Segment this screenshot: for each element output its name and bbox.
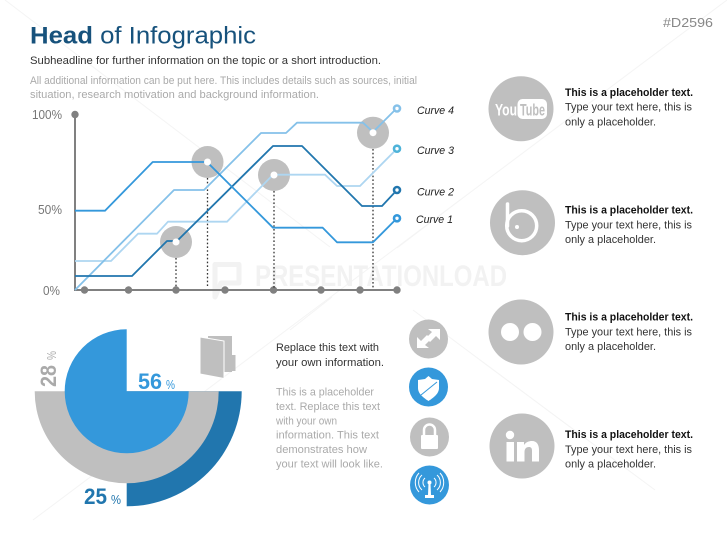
axis labels: 0%: [43, 283, 60, 298]
label 28%: [36, 351, 61, 387]
icon: youtube: You: [495, 100, 517, 120]
text: linkedin: [565, 429, 693, 470]
watermark: [215, 260, 507, 297]
label 56%: 56: [138, 369, 162, 394]
text block: replace text: with your own: [275, 416, 337, 428]
icon: padlock: [410, 418, 449, 456]
curve 2: [75, 146, 397, 276]
text block: replace text: Replace this text with: [276, 342, 379, 354]
product code: #D2596: [663, 16, 713, 30]
highlight discs: [160, 117, 389, 258]
curve labels: Curve 4: [417, 105, 454, 117]
highlight points: [172, 129, 376, 246]
curve 3: [75, 149, 397, 261]
line chart: [32, 105, 455, 298]
text: linkedin: This is a placeholder text.: [565, 429, 693, 441]
text: flickr: This is a placeholder text.: [565, 312, 693, 324]
text block: replace text: information. This text: [276, 430, 379, 442]
text: youtube: [565, 87, 693, 129]
curve labels: Curve 1: [416, 214, 453, 226]
icon: folder: [200, 336, 236, 378]
label 28%: 28: [36, 365, 61, 387]
text: linkedin: Type your text here, this is: [565, 444, 692, 456]
radial chart: %: [111, 492, 121, 507]
dark ring 25%: [127, 391, 242, 506]
axis labels: [32, 107, 62, 298]
text block: replace text: [275, 342, 384, 470]
icon: youtube: Tube: [520, 100, 545, 120]
axis labels: 100%: [32, 107, 62, 122]
curve end markers: [394, 106, 400, 221]
intro text: situation, research motivation and background information.: [30, 89, 319, 101]
icon: bebo: [490, 190, 555, 255]
text: youtube: This is a placeholder text.: [565, 87, 693, 99]
icon: linkedin: [490, 414, 554, 478]
text block: replace text: This is a placeholder: [276, 386, 374, 398]
text: bebo: [565, 205, 693, 246]
dotted drop lines: [176, 149, 373, 288]
curve 1: [75, 162, 397, 242]
intro text: All additional information can be put here. This includes details such as sources, initial: [30, 75, 417, 87]
icon: antenna: [410, 466, 449, 504]
intro text: [30, 75, 417, 101]
text block: replace text: demonstrates how: [276, 444, 367, 456]
radial chart: %: [166, 377, 175, 392]
label 28%: %: [44, 351, 59, 360]
text: bebo: Type your text here, this is: [565, 220, 692, 232]
text: flickr: Type your text here, this is: [565, 326, 692, 338]
text block: replace text: text. Replace this text: [276, 401, 380, 413]
icon: shield: [409, 368, 448, 406]
text: bebo: This is a placeholder text.: [565, 205, 693, 217]
axis labels: 50%: [38, 202, 62, 217]
watermark: PRESENTATIONLOAD: [255, 260, 507, 293]
curve labels: [416, 105, 455, 226]
icon: arrows: [409, 320, 448, 358]
text block: replace text: your text will look like.: [276, 458, 383, 470]
icon: youtube: [488, 76, 554, 141]
gray ring 28%: [35, 391, 219, 483]
label 25%: 25: [84, 484, 107, 509]
subheadline: Subheadline for further information on the topic or a short introduction.: [30, 55, 381, 67]
text: youtube: Type your text here, this is: [565, 102, 692, 114]
icon: flickr: [488, 300, 554, 364]
axes: [71, 111, 401, 294]
blue pie 56%: [65, 329, 189, 453]
radial chart: [35, 329, 242, 509]
text: youtube: only a placeholder.: [565, 117, 656, 129]
curve 4: [75, 108, 397, 290]
text: flickr: only a placeholder.: [565, 341, 656, 353]
text: bebo: only a placeholder.: [565, 234, 656, 246]
curve labels: Curve 2: [417, 186, 454, 198]
text: linkedin: only a placeholder.: [565, 458, 656, 470]
text: flickr: [565, 312, 693, 353]
title: Head of Infographic: [30, 22, 256, 50]
curve labels: Curve 3: [417, 145, 455, 157]
text block: replace text: your own information.: [276, 357, 384, 369]
